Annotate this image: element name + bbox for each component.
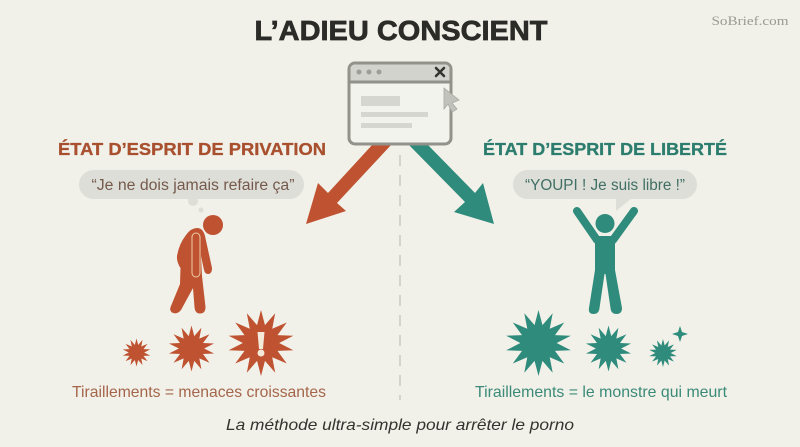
- footer subtitle: La méthode ultra-simple pour arrêter le porno: [226, 417, 574, 434]
- speech bubble: deprivation: [79, 170, 304, 212]
- caption: dying monster: Tiraillements = le monstre qui meurt: [475, 384, 728, 401]
- speech bubble: freedom: [513, 170, 697, 211]
- title: L’ADIEU CONSCIENT: [254, 15, 548, 46]
- icon: cheering person: [577, 211, 634, 314]
- caption: growing threats: Tiraillements = menaces croissantes: [72, 384, 326, 401]
- icon: cursor: [444, 88, 459, 112]
- large burst with exclamation: [229, 310, 293, 376]
- arrow: to freedom: [408, 144, 494, 224]
- craving bursts: growing threats: [123, 310, 293, 376]
- icon: browser window: [349, 63, 459, 144]
- craving bursts: dying monster: [506, 310, 688, 376]
- heading: freedom mindset: ÉTAT D’ESPRIT DE LIBERTÉ: [483, 138, 727, 159]
- medium burst: [169, 326, 214, 372]
- large burst: [506, 310, 571, 376]
- sparkle: [672, 326, 688, 342]
- small burst: [123, 338, 150, 366]
- speech bubble: freedom: “YOUPI ! Je suis libre !”: [525, 177, 685, 194]
- speech bubble: deprivation: “Je ne dois jamais refaire ça”: [92, 177, 294, 194]
- icon: slumped person: [170, 215, 223, 314]
- medium burst: [586, 326, 631, 372]
- watermark: SoBrief.com: [712, 13, 788, 28]
- heading: deprivation mindset: ÉTAT D’ESPRIT DE PRIVATION: [58, 138, 326, 159]
- arrow: to deprivation: [306, 144, 392, 224]
- small burst: [649, 339, 677, 367]
